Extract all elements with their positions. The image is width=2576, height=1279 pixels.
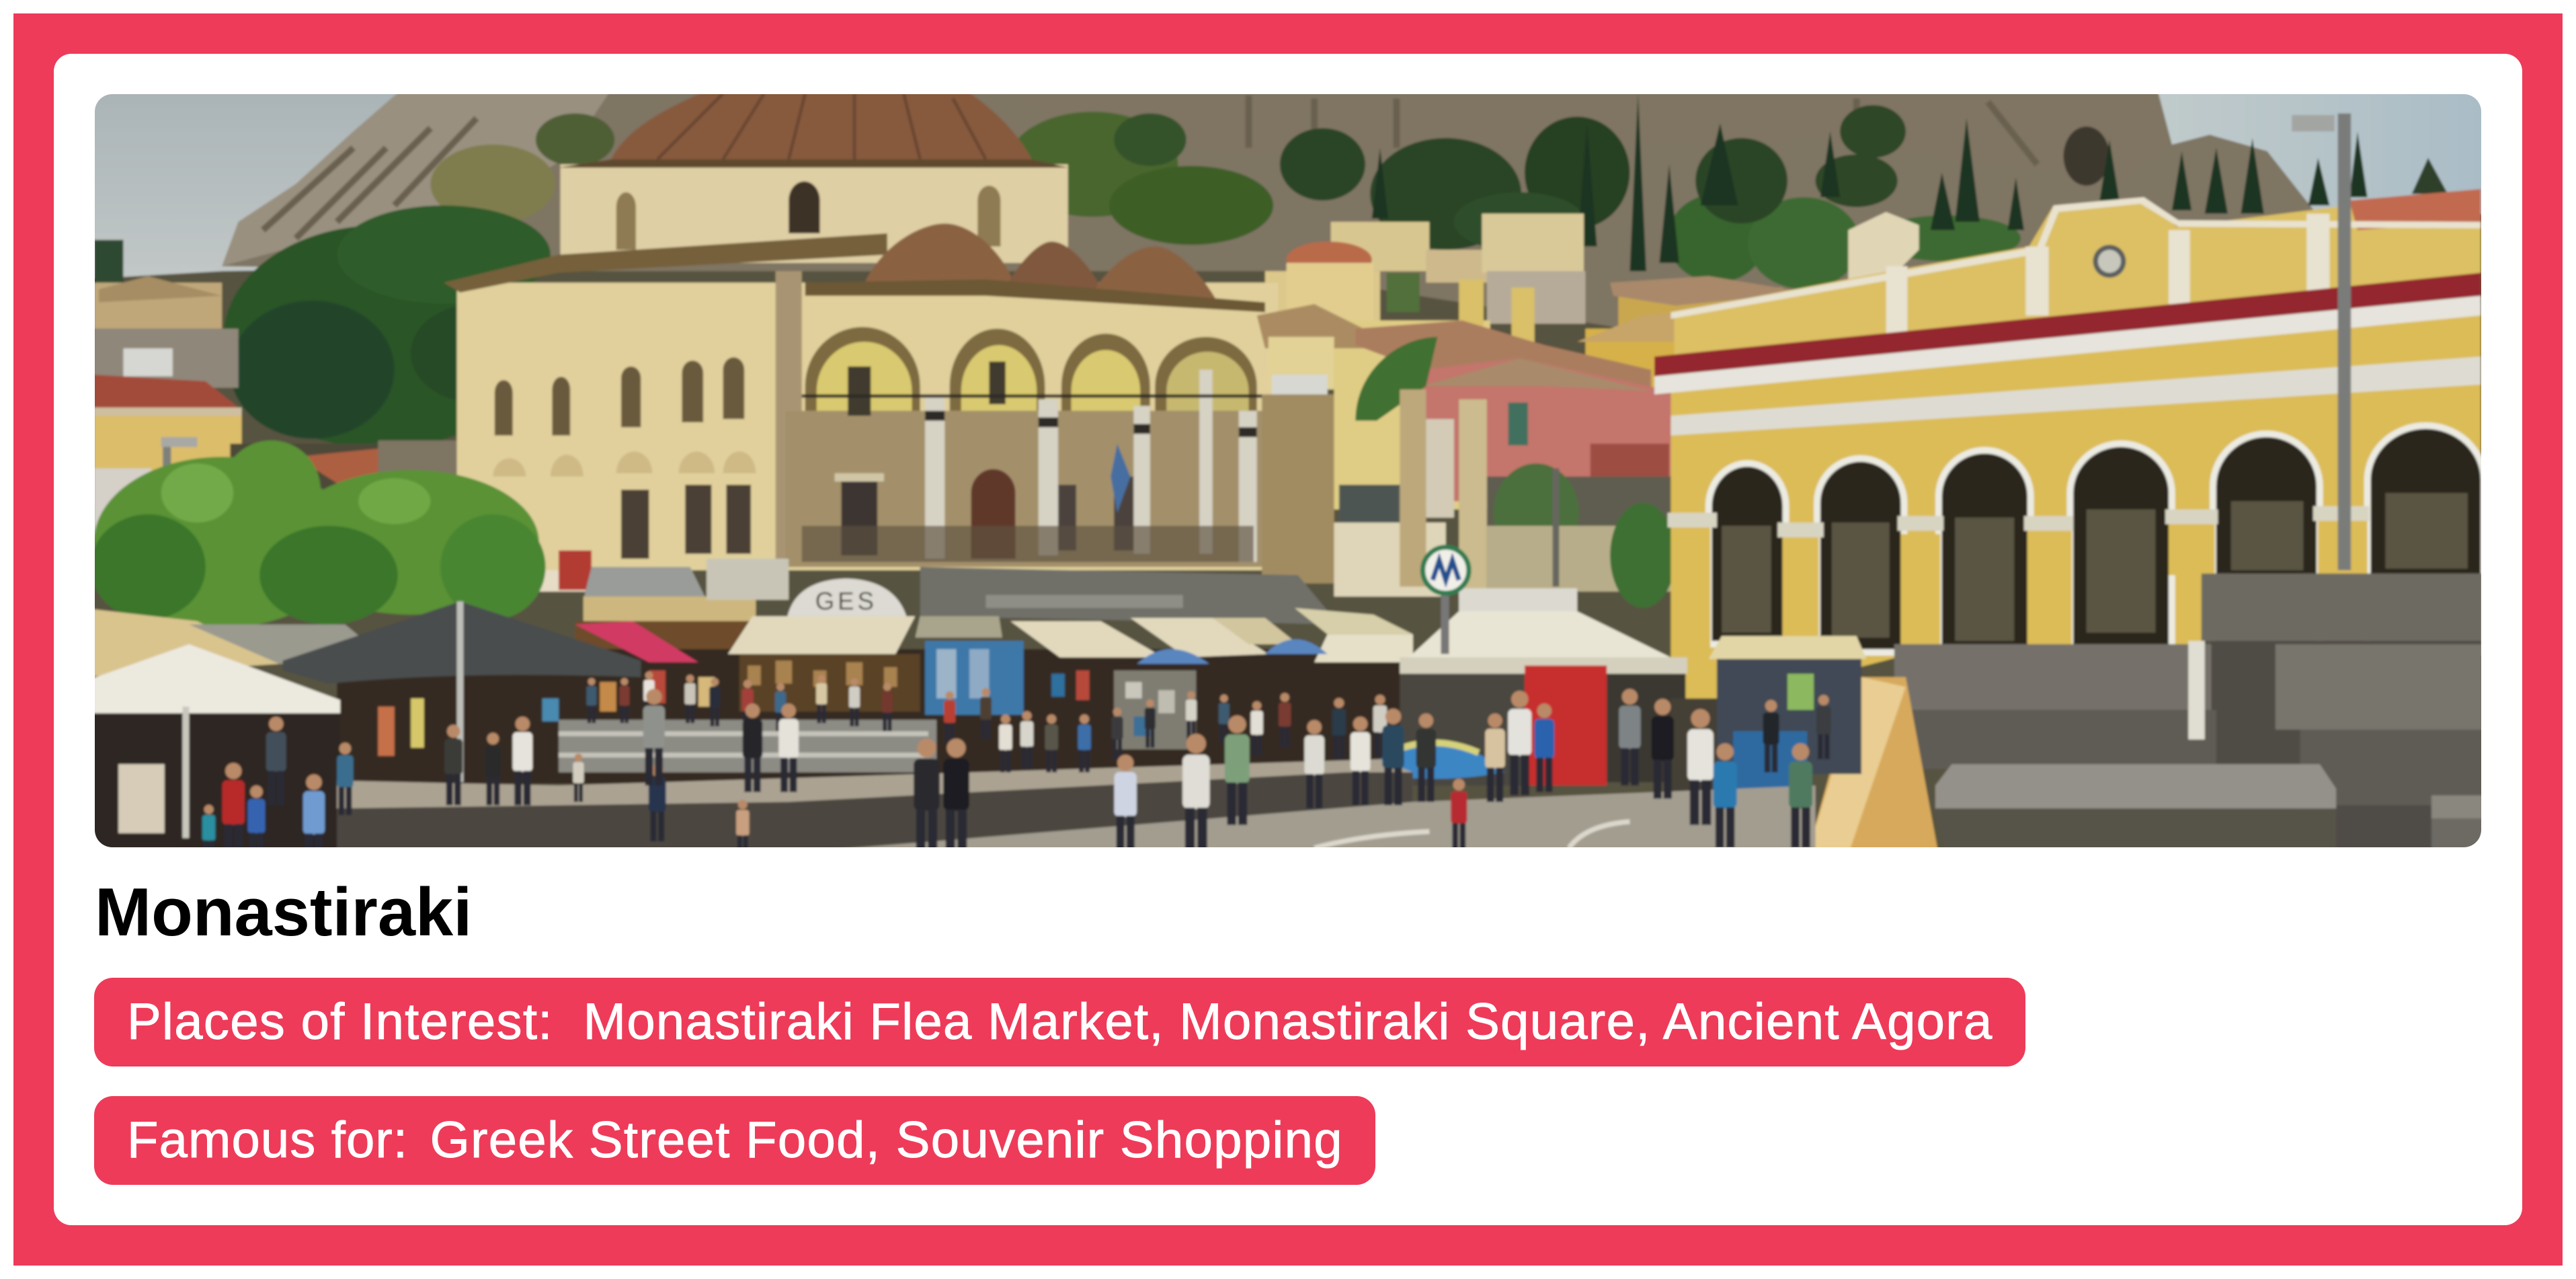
mosque: portico arches and stone wall — [785, 327, 1265, 567]
GES sign: GES — [815, 588, 877, 615]
awnings — [728, 608, 1413, 662]
crowd of visitors — [202, 672, 1831, 871]
left houses — [94, 276, 241, 575]
big green tree — [94, 205, 551, 449]
station arches and windows — [1712, 429, 2481, 649]
pill: famous for — [94, 1096, 1375, 1185]
trees on the slope — [1007, 93, 2448, 289]
white market tent — [1400, 588, 1720, 797]
pill: places of interest: Places of Interest: Monastiraki Flea Market, Monastiraki Square, Ancient Agora — [127, 993, 1993, 1050]
town buildings behind the ruins — [1257, 279, 1677, 608]
light green trees — [91, 440, 546, 628]
GES sign — [787, 578, 907, 618]
market stalls background — [337, 641, 1413, 784]
wooden signboard — [1807, 677, 1939, 855]
red roof behind the market — [230, 440, 633, 592]
background houses — [1265, 212, 1919, 411]
metro sign — [1423, 547, 1469, 654]
sky — [82, 82, 2497, 362]
street lamp — [2292, 114, 2351, 570]
rocky hillside — [222, 82, 2317, 337]
backdrop behind buildings — [82, 214, 2497, 863]
title: Monastiraki — [95, 875, 472, 950]
pill: famous for: Famous for: Greek Street Food, Souvenir Shopping — [127, 1112, 1343, 1169]
pill: places of interest — [94, 978, 2025, 1067]
small kiosk by station — [1709, 636, 1866, 797]
plaza ground and low wall — [337, 759, 1816, 855]
concrete blocks — [1894, 574, 2483, 855]
mosque: main body — [444, 233, 1278, 570]
red kiosk — [1525, 666, 1607, 785]
photo: Monastiraki Square panorama — [95, 94, 2481, 847]
parasols — [82, 601, 1505, 858]
yellow station building — [1654, 189, 2481, 707]
mosque: upper drum and main dome — [559, 82, 1068, 263]
mosque: small domes — [805, 223, 1265, 312]
shop signs and small awnings behind — [559, 551, 1339, 657]
